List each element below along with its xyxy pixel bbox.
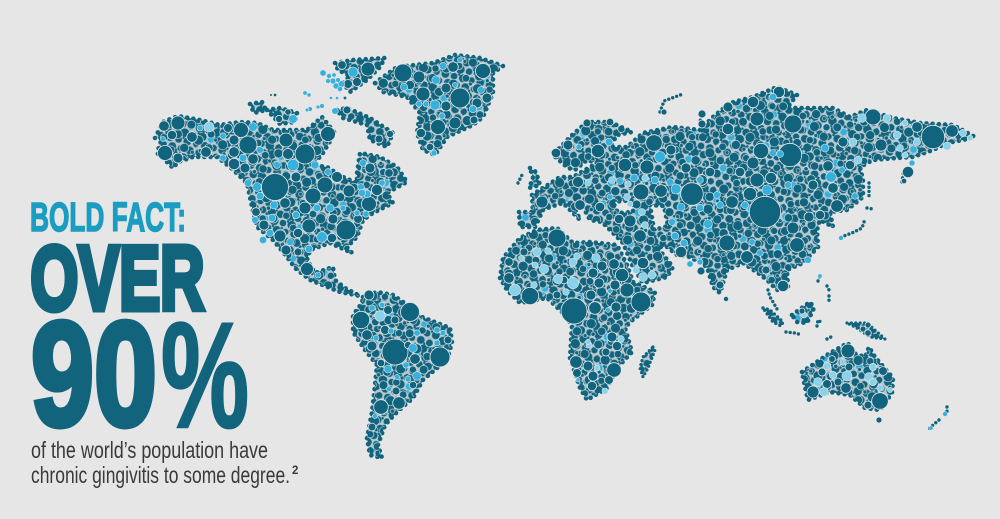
caption text: chronic gingivitis to some degree. (31, 462, 290, 488)
statistic: 90%: % (161, 291, 249, 459)
statistic: 90%: 90 (31, 292, 157, 457)
caption text: 2 (292, 465, 298, 477)
landmass: Southeast Asian islands (763, 274, 885, 339)
landmass: Africa (500, 228, 655, 400)
landmass: North America (155, 116, 407, 296)
landmass: Europe and Asia (519, 86, 975, 293)
caption text (31, 437, 298, 488)
landmass: European and Asian islands (518, 94, 915, 302)
caption text: of the world’s population have (31, 437, 268, 463)
headline: OVER: OVER (30, 228, 204, 330)
landmass: Australia (802, 343, 893, 410)
landmass: South America (352, 290, 452, 458)
landmass: Madagascar (640, 347, 655, 377)
landmass: Arctic islands (250, 58, 394, 147)
dotted world map (155, 55, 975, 458)
headline: BOLD FACT: BOLD FACT: (30, 194, 186, 240)
landmass: Greenland (375, 55, 503, 156)
landmass: Tasmania and New Zealand (876, 407, 948, 431)
